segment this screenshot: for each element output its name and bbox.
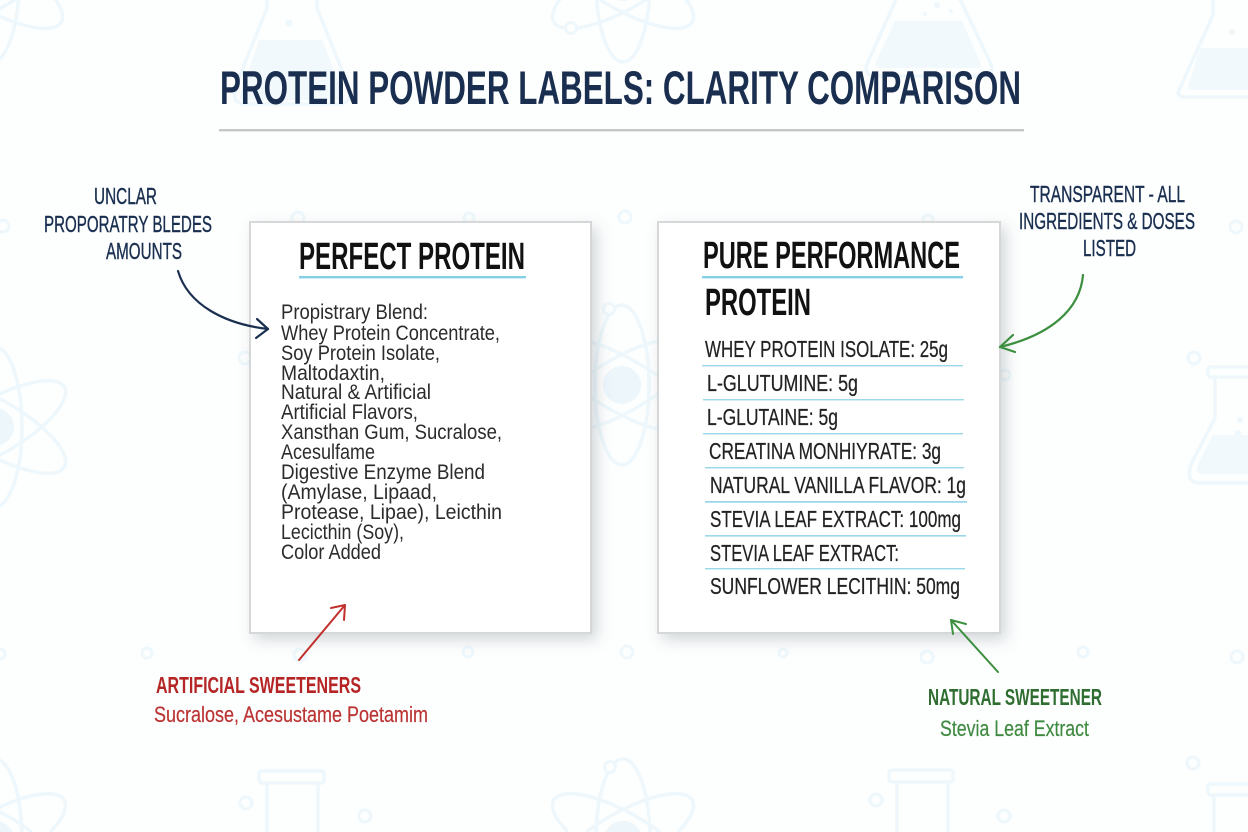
ingredient list: itemised doses <box>702 336 967 599</box>
panel heading: Perfect Protein: PERFECT PROTEIN <box>299 236 525 278</box>
ingredient list: itemised doses: SUNFLOWER LECITHIN: 50mg <box>710 573 960 599</box>
callout: artificial sweeteners: ARTIFICIAL SWEETENERS <box>156 672 361 698</box>
callout: unclear proprietary blends: UNCLAR <box>94 183 157 209</box>
callout: transparent ingredients <box>1019 181 1195 261</box>
ingredient list: opaque blend: Protease, Lipae), Leicthin <box>281 501 502 524</box>
ingredient list: opaque blend: Maltodaxtin, <box>281 362 385 385</box>
ingredient list: opaque blend: Propistrary Blend: <box>281 301 428 324</box>
ingredient list: itemised doses: WHEY PROTEIN ISOLATE: 25g <box>705 336 948 362</box>
ingredient list: opaque blend: Whey Protein Concentrate, <box>281 322 500 345</box>
ingredient list: opaque blend: Acesulfame <box>281 441 375 464</box>
callout: unclear proprietary blends: AMOUNTS <box>106 238 182 264</box>
panel: Perfect Protein label <box>250 222 591 633</box>
ingredient list: itemised doses: STEVIA LEAF EXTRACT: 100mg <box>710 506 961 532</box>
panel heading: Pure Performance Protein: PROTEIN <box>705 282 811 324</box>
ingredient list: opaque blend: Artificial Flavors, <box>281 401 418 424</box>
callout: artificial sweeteners <box>154 672 428 727</box>
panel heading: Pure Performance Protein <box>702 235 963 324</box>
callout: unclear proprietary blends: PROPORATRY BLEDES <box>44 211 212 237</box>
callout: transparent ingredients: LISTED <box>1083 235 1136 261</box>
callout: natural sweetener <box>928 684 1102 741</box>
callout: natural sweetener: Stevia Leaf Extract <box>940 716 1090 741</box>
ingredient list: opaque blend: Lecicthin (Soy), <box>281 521 404 544</box>
ingredient list: opaque blend: Digestive Enzyme Blend <box>281 461 485 484</box>
arrow: unclear callout to label <box>178 271 268 338</box>
ingredient list: opaque blend <box>281 301 502 564</box>
panel heading: Pure Performance Protein: PURE PERFORMANCE <box>703 235 960 277</box>
ingredient list: itemised doses: L-GLUTUMINE: 5g <box>707 370 858 396</box>
ingredient list: opaque blend: Soy Protein Isolate, <box>281 342 440 365</box>
arrow: artificial sweeteners <box>299 605 345 660</box>
callout: artificial sweeteners: Sucralose, Acesustame Poetamim <box>154 702 428 727</box>
arrow: transparent callout to label <box>1000 275 1083 352</box>
ingredient list: opaque blend: Natural & Artificial <box>281 381 431 404</box>
callout: unclear proprietary blends <box>44 183 212 264</box>
ingredient list: opaque blend: Xansthan Gum, Sucralose, <box>281 421 502 444</box>
ingredient list: itemised doses: L-GLUTAINE: 5g <box>707 404 838 430</box>
arrow: natural sweetener <box>951 620 998 672</box>
ingredient list: opaque blend: (Amylase, Lipaad, <box>281 481 437 504</box>
ingredient list: itemised doses: NATURAL VANILLA FLAVOR: 1g <box>710 472 966 498</box>
ingredient list: opaque blend: Color Added <box>281 541 381 564</box>
ingredient list: itemised doses: CREATINA MONHIYRATE: 3g <box>709 438 941 464</box>
ingredient list: itemised doses: STEVIA LEAF EXTRACT: <box>710 540 899 566</box>
panel: Pure Performance Protein label <box>658 222 1000 633</box>
callout: natural sweetener: NATURAL SWEETENER <box>928 684 1102 710</box>
